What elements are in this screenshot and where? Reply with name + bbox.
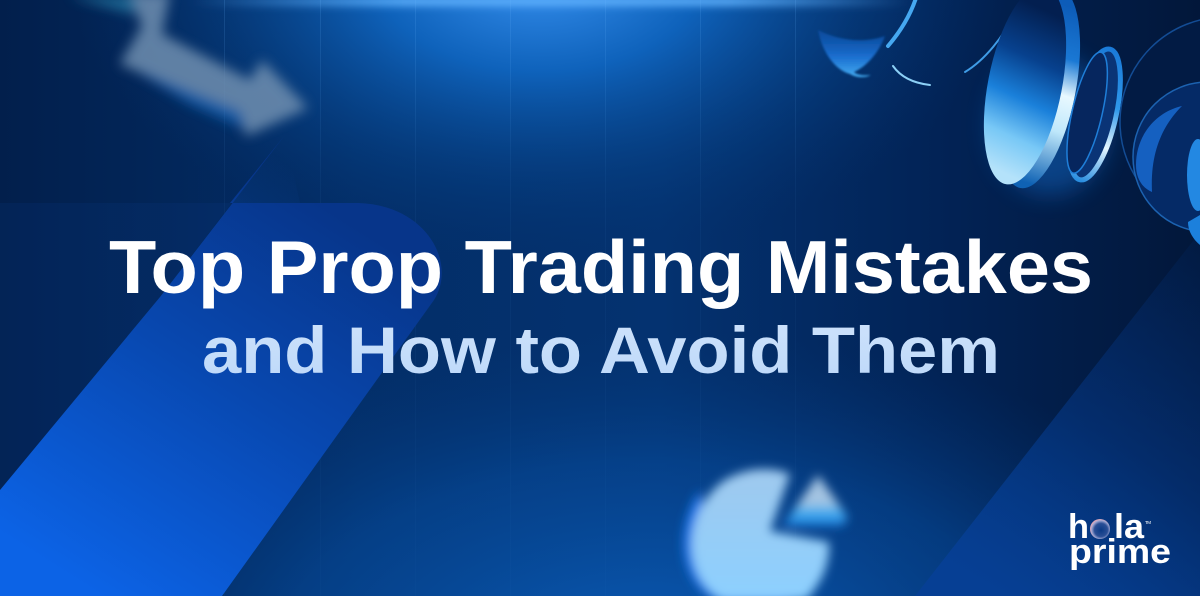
glass lenses xyxy=(818,0,1200,245)
lens glow xyxy=(990,55,1110,195)
blurred falling arrow xyxy=(68,0,308,136)
heading line 1: Top Prop Trading Mistakes xyxy=(109,225,1093,309)
diagonal band: right xyxy=(915,232,1200,596)
main lens disc xyxy=(969,0,1095,195)
blurred pie chart xyxy=(683,469,848,596)
title xyxy=(109,225,1093,387)
logo: hola prime: h xyxy=(1068,508,1089,546)
logo: hola prime xyxy=(1068,508,1171,571)
logo: hola prime: la xyxy=(1114,508,1145,546)
ring lens xyxy=(1057,44,1130,184)
thin ring arcs xyxy=(888,0,1014,85)
diagonal band: left xyxy=(0,135,442,596)
heading line 2: and How to Avoid Them xyxy=(202,313,1000,387)
icon: bubble xyxy=(1090,519,1110,539)
small lens left xyxy=(818,30,885,77)
logo: hola prime: prime xyxy=(1069,533,1171,571)
large glass sphere on right edge xyxy=(1120,17,1200,227)
logo: hola prime: TM xyxy=(1145,520,1151,525)
